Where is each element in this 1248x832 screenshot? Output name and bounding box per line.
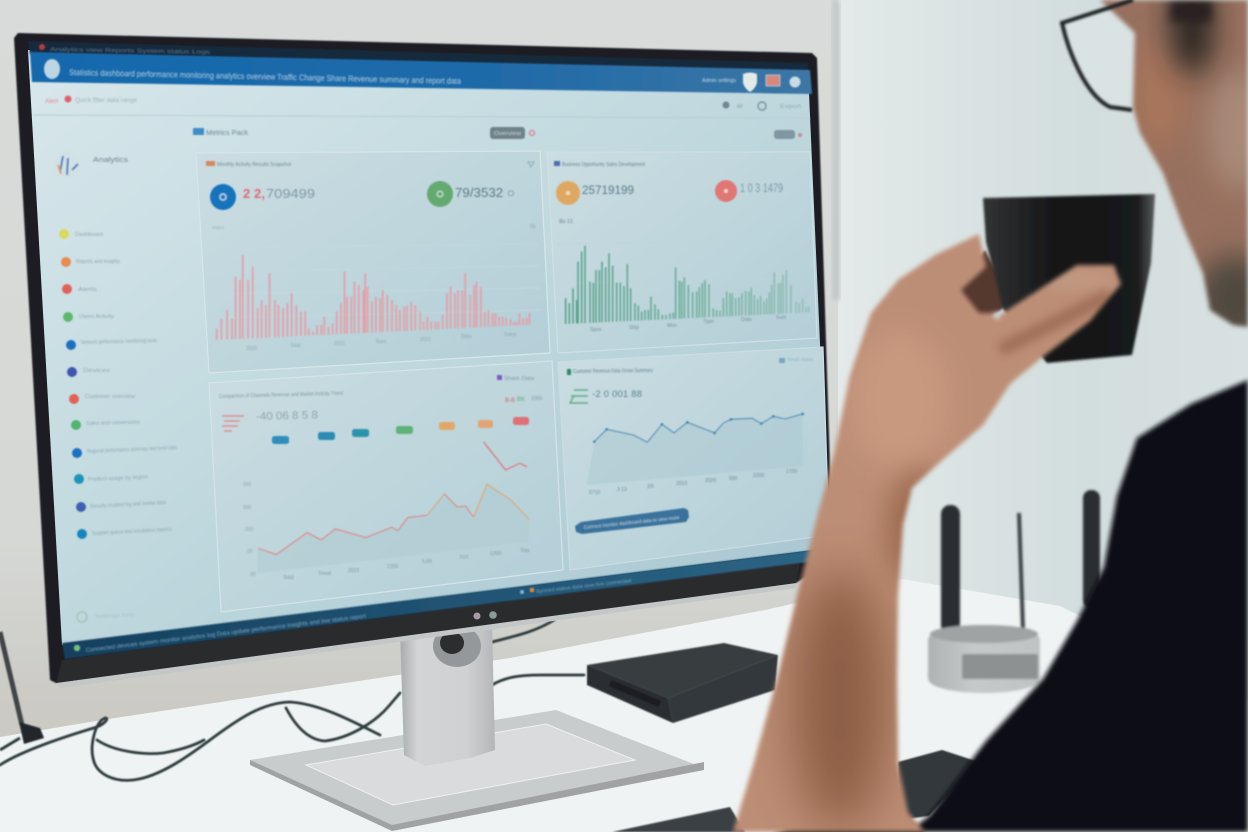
panel heading: Comparison of Channels Revenue and Market Activity Trend — [219, 391, 343, 400]
KPI: red — [715, 180, 783, 202]
pink chart axis labels: Sales — [504, 332, 517, 338]
line chart axis labels: 1200 — [387, 564, 398, 570]
line chart axis labels: 2023 — [348, 568, 359, 574]
keyboard — [612, 750, 979, 832]
lens — [1060, 2, 1133, 108]
panel: pink bar chart with KPIs: 05 — [530, 224, 536, 230]
green chart axis labels: Data — [741, 317, 752, 323]
sub-header: All — [737, 104, 743, 110]
sidebar logo — [53, 151, 128, 179]
filter button — [490, 127, 534, 139]
green chart axis labels — [590, 315, 786, 333]
stand base plate — [250, 710, 704, 831]
glasses — [1062, 0, 1133, 110]
line chart: multi-series — [257, 442, 529, 573]
blue chart axis labels: 3 13 — [617, 487, 627, 493]
nav items — [59, 229, 178, 539]
KPI value: -40 06 8 5 8 — [256, 409, 318, 423]
sidebar — [53, 151, 178, 622]
nav items: Dashboard — [75, 232, 103, 238]
bar chart: green — [564, 245, 810, 325]
line chart axis labels: Total — [283, 575, 294, 581]
sidebar footer — [77, 612, 135, 622]
legend top right: 1000 — [531, 396, 542, 402]
task bar text — [74, 578, 632, 654]
pink chart axis labels: Total — [290, 343, 301, 349]
line chart axis labels: 1200 — [490, 551, 501, 557]
monitor stand and base — [250, 620, 704, 831]
line chart axis labels: Tota — [520, 548, 530, 554]
person: face and glasses — [1060, 0, 1248, 345]
legend top right: BK — [517, 397, 525, 403]
nav items: Alerts — [78, 287, 97, 293]
panel heading — [206, 161, 534, 168]
bottom task bar — [62, 548, 829, 659]
KPI value with icon: -2 0 001 88 — [592, 389, 642, 400]
pink chart axis labels: Data — [461, 334, 472, 340]
panel heading — [554, 161, 645, 168]
call to action pill: Connect monitor dashboard data to view more — [584, 515, 680, 531]
header content — [39, 44, 800, 92]
top strip — [28, 41, 808, 72]
KPI: blue: 709499 — [266, 187, 315, 201]
header user controls — [702, 72, 800, 92]
pink chart axis labels — [246, 332, 517, 352]
blue chart axis labels: 2200 — [753, 473, 764, 479]
blue chart axis labels: 2/5 — [647, 484, 654, 490]
panel: pink bar chart with KPIs — [196, 151, 550, 373]
blue chart axis labels: 2020 — [705, 478, 716, 484]
header user controls: Admin settings — [702, 78, 736, 84]
section title: Metrics Pack — [206, 130, 249, 137]
green chart axis labels: Sum — [776, 315, 786, 321]
line chart axis labels: TOT — [459, 555, 469, 561]
panel heading — [567, 357, 814, 375]
bar chart: pink — [215, 254, 531, 340]
panel: green bar chart with KPIs — [547, 152, 817, 353]
pink chart axis labels: 2021 — [334, 341, 345, 347]
panel heading: Business Opportunity Sales Development — [562, 162, 645, 168]
panel: green bar chart with KPIs: $ts 13 — [559, 219, 573, 225]
pink chart axis labels: Bars — [376, 339, 387, 345]
sidebar footer: Settings help — [95, 612, 135, 620]
panel heading: Customer Revenue Data Gross Summary — [573, 368, 653, 375]
panel: multi-line chart: 000 — [245, 527, 254, 533]
panel: multi-line chart: 00 — [247, 549, 253, 555]
stand neck — [400, 620, 495, 766]
KPI: green: 79/3532 ○ — [455, 186, 515, 200]
sidebar logo: Analytics — [93, 155, 128, 164]
panel heading: Monthly Activity Results Snapshot — [217, 162, 291, 168]
nav items: Customer overview — [85, 394, 136, 400]
nav items: Sales and conversions — [86, 420, 140, 427]
monitor — [14, 33, 833, 688]
cables behind and around the monitor stand — [0, 620, 584, 780]
panel: pink bar chart with KPIs: Sales — [212, 225, 225, 231]
green chart axis labels: Spos — [590, 327, 602, 333]
blue chart axis labels: 1700 — [786, 469, 797, 475]
nav items: Support queue and escalation metrics — [92, 527, 172, 537]
call to action pill — [575, 508, 689, 534]
line chart axis labels — [283, 548, 530, 581]
KPI: blue — [210, 184, 315, 210]
panel heading: Total stats — [787, 357, 814, 363]
left desk antenna — [0, 632, 44, 750]
green chart axis labels: Type — [703, 319, 714, 325]
section title — [193, 128, 249, 137]
network box — [587, 643, 778, 723]
blue chart axis labels: 2010 — [676, 481, 687, 487]
KPI value with icon — [570, 389, 642, 403]
panel: multi-line chart: 00 — [250, 572, 256, 578]
blue chart axis labels — [589, 469, 797, 496]
line chart axis labels: 5,09 — [422, 559, 432, 565]
legend top right: Share Data — [504, 376, 534, 382]
KPI: orange: 25719199 — [582, 185, 634, 197]
monitor bezel — [14, 33, 833, 683]
header title: Statistics dashboard performance monitoring analytics overview Traffic Change Share Revenue summary and report data — [69, 67, 461, 86]
legend top right: B-B — [505, 398, 515, 404]
person: hand and forearm — [720, 220, 1140, 832]
sub-header: Alert — [45, 98, 58, 105]
filter button: Overview — [494, 131, 521, 137]
blue chart axis labels: 5710 — [589, 490, 600, 496]
top strip text: Analytics view Reports System status Logs — [50, 47, 210, 56]
task bar text: Connected devices system monitor analytics log Data update performance insights and live status report — [86, 614, 367, 654]
gap between thumb and fingers — [950, 250, 1012, 324]
status pills — [272, 417, 529, 444]
screen background — [28, 50, 829, 645]
pink chart axis labels: 2022 — [420, 337, 431, 343]
logo — [44, 59, 60, 79]
line chart axis labels: Trend — [318, 571, 331, 577]
panel: blue line chart — [558, 347, 829, 570]
cable port in stand — [433, 625, 481, 667]
KPI: green — [427, 181, 515, 207]
green chart axis labels: Mon — [667, 323, 677, 329]
sub-header — [33, 96, 810, 139]
nav items: Network performance monitoring tools — [81, 338, 157, 346]
panel: multi-line chart — [209, 361, 563, 612]
line chart: blue — [587, 413, 804, 485]
wireless router with antennas — [928, 490, 1100, 693]
KPI: orange — [556, 181, 634, 205]
KPI: red: 1 0 3 1479 — [740, 183, 783, 195]
nav items: Security incident log and review data — [90, 500, 167, 510]
panel: multi-line chart: 000 — [243, 482, 252, 488]
pink chart axis labels: 2020 — [246, 346, 257, 352]
face — [1095, 0, 1248, 345]
nav items: Users Activity — [79, 314, 114, 320]
nav items: Product usage by region — [88, 474, 148, 483]
secondary button — [774, 130, 802, 139]
green chart axis labels: Ship — [629, 325, 639, 331]
thumb gap highlight — [994, 312, 1000, 318]
coffee cup — [983, 194, 1155, 363]
sub-header: Export — [780, 104, 802, 110]
desk surface — [0, 579, 1248, 832]
nav items: Reports and Insights — [76, 259, 120, 265]
KPI value — [222, 409, 318, 431]
nav items: Devices — [83, 368, 110, 374]
sub-header: Quick filter data range — [75, 98, 138, 104]
monitor front buttons — [474, 611, 497, 620]
task bar text: Synced status data now live connected — [536, 578, 632, 595]
header bar — [30, 52, 812, 94]
legend top right — [497, 375, 542, 404]
nav items: Regional performance summary and trend data — [87, 445, 178, 455]
person: torso in dark shirt — [770, 380, 1248, 832]
panel: multi-line chart: 000 — [243, 505, 252, 511]
blue chart axis labels: 500 — [729, 476, 738, 482]
KPI: blue: 2 2, — [243, 186, 265, 201]
